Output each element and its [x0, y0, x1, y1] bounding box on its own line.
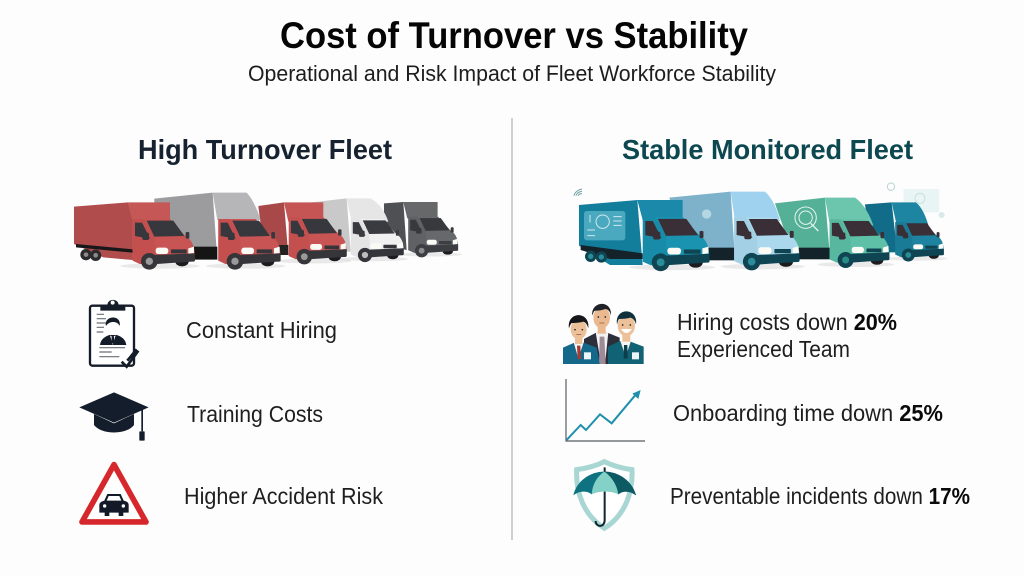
title: Cost of Turnover vs Stability [280, 15, 748, 56]
icon: rising line chart [566, 379, 645, 441]
wifi signal icon [574, 189, 582, 196]
truck 2 grey and red [154, 193, 286, 270]
illustration: teal monitored trucks [574, 183, 948, 271]
subtitle: Operational and Risk Impact of Fleet Workforce Stability [248, 61, 777, 86]
monitoring overlay [887, 183, 945, 218]
label: constant hiring: Constant Hiring [186, 317, 337, 343]
truck C green [775, 198, 894, 268]
label: preventable incidents: Preventable incidents down 17% [670, 483, 970, 509]
icon: experienced team [563, 304, 644, 364]
middle person [584, 332, 620, 364]
truck 5 dark grey [384, 202, 462, 257]
truck 3 red [258, 202, 351, 264]
truck 4 white [312, 198, 408, 262]
icon: graduation cap [79, 392, 149, 441]
left person [563, 342, 600, 364]
icon: accident warning triangle [82, 465, 146, 522]
truck 1 red [74, 202, 200, 270]
icon: clipboard resume [90, 300, 141, 370]
icon: umbrella shield [573, 462, 636, 528]
truck A teal [579, 200, 715, 271]
label: higher accident risk: Higher Accident Risk [184, 483, 383, 509]
truck B light blue [669, 192, 805, 270]
panel: high turnover fleet [74, 134, 462, 522]
label: hiring costs and experienced team: Experienced Team [677, 336, 850, 362]
label: training costs: Training Costs [187, 401, 323, 427]
heading: stable monitored fleet: Stable Monitored Fleet [622, 134, 913, 165]
right person [608, 341, 644, 364]
illustration: red and grey trucks [74, 193, 462, 270]
truck D deep teal [865, 202, 948, 261]
panel: stable monitored fleet [563, 134, 970, 528]
heading: high turnover fleet: High Turnover Fleet [138, 134, 392, 165]
label: hiring costs and experienced team: Hiring costs down 20% [677, 309, 897, 335]
label: hiring costs and experienced team [677, 309, 897, 362]
label: onboarding time: Onboarding time down 25% [673, 400, 943, 426]
